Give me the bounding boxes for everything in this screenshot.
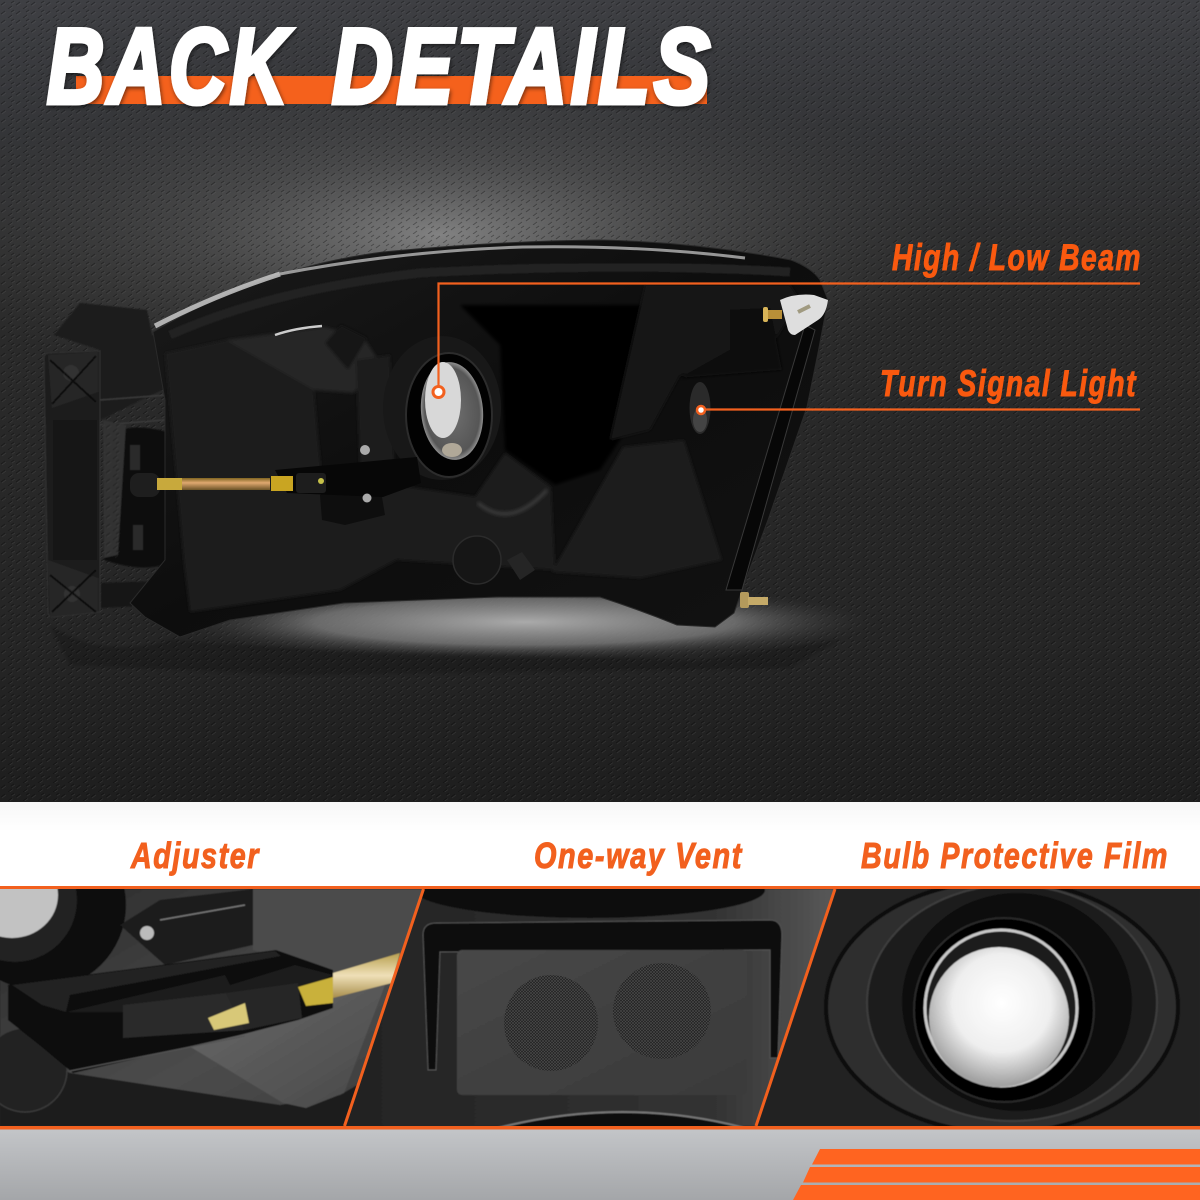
threaded section (298, 977, 333, 1006)
title: BACK DETAILS with orange highlight (47, 6, 714, 126)
lower curved panel (398, 453, 555, 570)
top dark shadow (422, 889, 766, 918)
black slider rail (8, 950, 333, 1073)
lower dark band (0, 1072, 356, 1126)
footer orange stripes (793, 1149, 1200, 1200)
headlight back view (44, 240, 828, 637)
floor light under headlight (175, 584, 875, 660)
panel: one-way vent photo (422, 889, 834, 1126)
mesh circle left (504, 975, 598, 1071)
lower left circle (0, 1028, 67, 1112)
bottom brass screw (740, 592, 768, 608)
plate highlight (275, 326, 322, 335)
callout line: High / Low Beam (438, 284, 1140, 392)
title text: BACK (47, 6, 292, 126)
label: One-way Vent: One-way Vent (534, 835, 743, 876)
white mounting nut (763, 295, 828, 335)
callout dot: High / Low Beam (433, 386, 444, 398)
turn signal socket (690, 382, 710, 434)
plug nub (507, 552, 535, 580)
lens collar (356, 355, 395, 480)
orange highlight bar (76, 76, 707, 104)
lower right trapezoid panel (552, 440, 722, 578)
vent cap (453, 536, 501, 584)
callout dot: Turn Signal Light (697, 406, 705, 414)
clear lens strip along top edge (155, 247, 745, 326)
lower left band (184, 483, 478, 612)
upper rim (170, 267, 790, 335)
mesh circle right (613, 963, 711, 1059)
white film disc (929, 947, 1069, 1087)
light wedge (184, 985, 385, 1108)
housing inner panels (165, 285, 800, 612)
panel: white label band (0, 802, 1200, 886)
grey upper right area (253, 889, 382, 968)
title text: DETAILS (332, 6, 714, 126)
panel: dark textured background (0, 0, 1200, 802)
headlight reflection (50, 625, 840, 675)
brass rod (333, 953, 400, 998)
panel: grey footer band (0, 1130, 1200, 1200)
adjuster assembly (130, 445, 421, 525)
bulb socket rings (383, 336, 501, 480)
headlight housing silhouette (130, 240, 828, 637)
glass ring (925, 930, 1077, 1086)
inner rim (914, 918, 1094, 1102)
label: Adjuster: Adjuster (130, 835, 260, 876)
mounting bracket (44, 303, 192, 617)
left body block (165, 340, 325, 563)
central dark cavity (460, 305, 640, 485)
slanted orange dividers and frame lines (0, 886, 1200, 1130)
bulb ring corner (0, 889, 126, 986)
raised vent frame (423, 920, 782, 1070)
right upper panel (610, 285, 800, 440)
bottom arc (498, 1110, 744, 1126)
plate knob (325, 325, 367, 370)
panel: bulb protective film photo (824, 889, 1180, 1126)
gold stud (208, 1003, 249, 1030)
right mount block (680, 308, 782, 378)
panel: adjuster photo (0, 889, 422, 1113)
callout line: Turn Signal Light (701, 408, 1140, 411)
right side strap (726, 325, 815, 590)
upper-left plate (226, 327, 377, 393)
black inner ring (902, 893, 1132, 1111)
outer seal ring (826, 881, 1178, 1133)
second seal ring (867, 885, 1157, 1121)
recessed vent plate (457, 950, 747, 1095)
mounting clip with screw (120, 889, 253, 965)
black adjuster tube (226, 983, 302, 1030)
